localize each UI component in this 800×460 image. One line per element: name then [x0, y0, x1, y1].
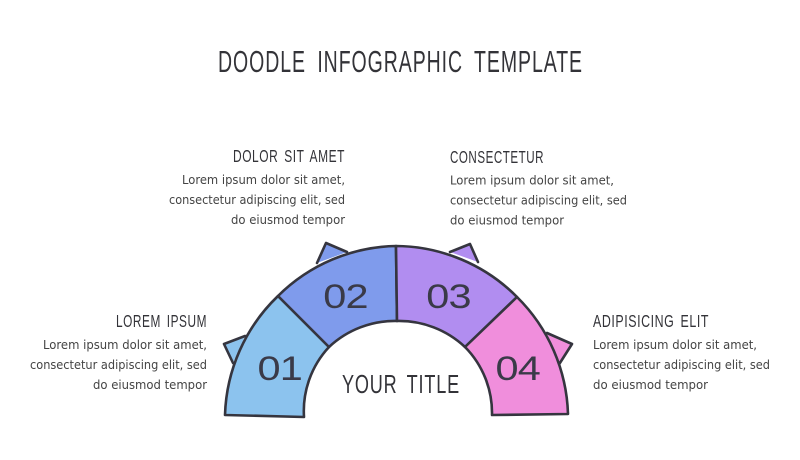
semicircle chart [225, 246, 568, 417]
icon: tab for segment 02 [317, 243, 347, 263]
segment 03 [396, 246, 517, 347]
text block: consectetur: Lorem ipsum dolor sit amet, [450, 174, 614, 188]
segment 02 [278, 246, 397, 347]
text block: adipisicing elit: consectetur adipiscing elit, sed [593, 358, 770, 373]
text block: adipisicing elit: do eiusmod tempor [593, 378, 709, 393]
number 03: 03 [426, 278, 471, 316]
text block: dolor sit amet [169, 146, 346, 228]
number 02: 02 [323, 278, 368, 316]
number 04: 04 [496, 350, 540, 388]
text block: lorem ipsum [30, 311, 208, 393]
text block: consectetur [450, 147, 627, 228]
text block: lorem ipsum: Lorem ipsum dolor sit amet, [43, 338, 207, 353]
center label: YOUR TITLE [342, 369, 460, 399]
number 01: 01 [258, 350, 302, 388]
text block: dolor sit amet: Lorem ipsum dolor sit amet, [182, 173, 345, 188]
segment 01 [225, 296, 329, 417]
segment 04 [465, 297, 568, 415]
text block: adipisicing elit: Lorem ipsum dolor sit amet, [593, 338, 757, 353]
icon: tab for segment 01 [224, 336, 245, 363]
text block: adipisicing elit [593, 311, 770, 393]
text block: consectetur: CONSECTETUR [450, 147, 544, 167]
title: DOODLE INFOGRAPHIC TEMPLATE [218, 44, 583, 79]
text block: lorem ipsum: do eiusmod tempor [93, 378, 208, 393]
text block: consectetur: do eiusmod tempor [450, 214, 565, 228]
text block: lorem ipsum: consectetur adipiscing elit, sed [30, 358, 207, 373]
text block: lorem ipsum: LOREM IPSUM [116, 311, 207, 331]
text block: dolor sit amet: consectetur adipiscing elit, sed [169, 193, 345, 208]
text block: dolor sit amet: do eiusmod tempor [231, 213, 346, 228]
icon: tab for segment 04 [547, 333, 572, 366]
text block: consectetur: consectetur adipiscing elit, sed [450, 194, 627, 208]
icon: tab for segment 03 [450, 244, 478, 262]
text block: dolor sit amet: DOLOR SIT AMET [233, 146, 345, 166]
text block: adipisicing elit: ADIPISICING ELIT [593, 311, 709, 331]
